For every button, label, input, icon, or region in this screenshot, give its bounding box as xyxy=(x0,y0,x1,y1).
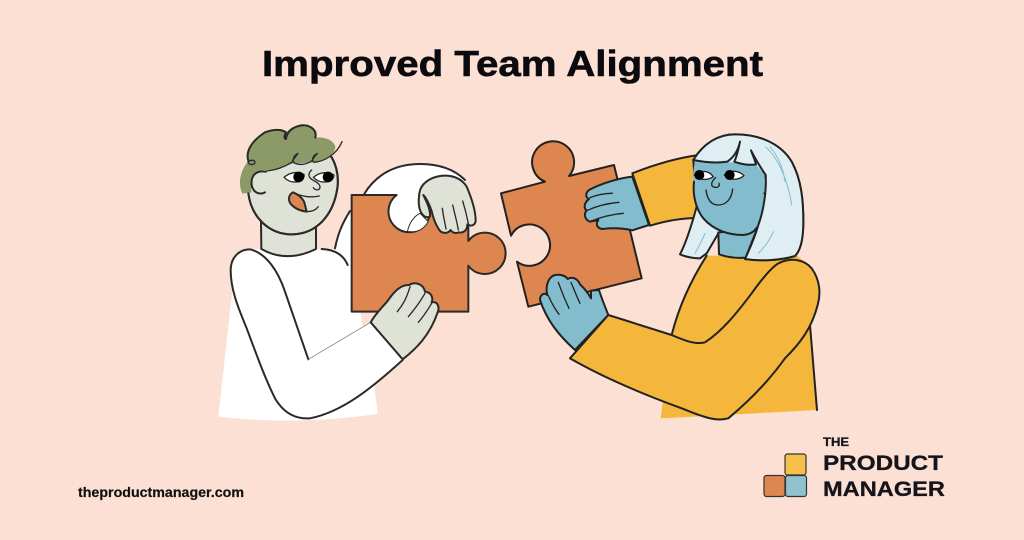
front sleeve xyxy=(570,260,819,419)
upper hand xyxy=(419,176,476,233)
right figure: woman holding puzzle piece xyxy=(501,134,819,419)
torso xyxy=(218,249,378,421)
left eye xyxy=(694,171,713,179)
body xyxy=(661,256,818,418)
puzzle piece right xyxy=(501,141,642,307)
left eye xyxy=(284,172,304,182)
hair front right xyxy=(745,138,803,260)
nose and smile xyxy=(706,178,733,205)
logo icon: blocks xyxy=(764,454,806,496)
neck xyxy=(261,222,316,256)
arm seen through puzzle hole xyxy=(407,213,428,232)
hair back xyxy=(680,134,803,260)
lower blue hand xyxy=(540,275,608,350)
ear xyxy=(252,171,266,194)
right eye xyxy=(313,173,334,182)
mouth xyxy=(289,192,307,212)
logo wordmark: THE xyxy=(823,437,849,449)
face xyxy=(693,161,765,235)
front arm sleeve xyxy=(231,249,403,418)
right eye xyxy=(724,171,744,179)
puzzle piece left xyxy=(352,195,506,312)
upper arm xyxy=(632,155,708,226)
logo xyxy=(764,437,946,501)
website url: theproductmanager.com xyxy=(78,485,244,500)
title: Improved Team Alignment xyxy=(262,43,763,84)
left figure: man holding puzzle piece xyxy=(218,125,506,421)
lower hand xyxy=(371,283,439,359)
neck xyxy=(718,230,757,258)
nose xyxy=(309,170,320,190)
hair xyxy=(240,125,335,194)
ear xyxy=(764,176,774,194)
head xyxy=(240,125,342,234)
bangs xyxy=(693,134,766,175)
back arm xyxy=(334,164,470,265)
logo: MANAGER xyxy=(823,477,946,501)
top blue hand xyxy=(585,177,649,230)
logo: PRODUCT xyxy=(823,451,943,475)
